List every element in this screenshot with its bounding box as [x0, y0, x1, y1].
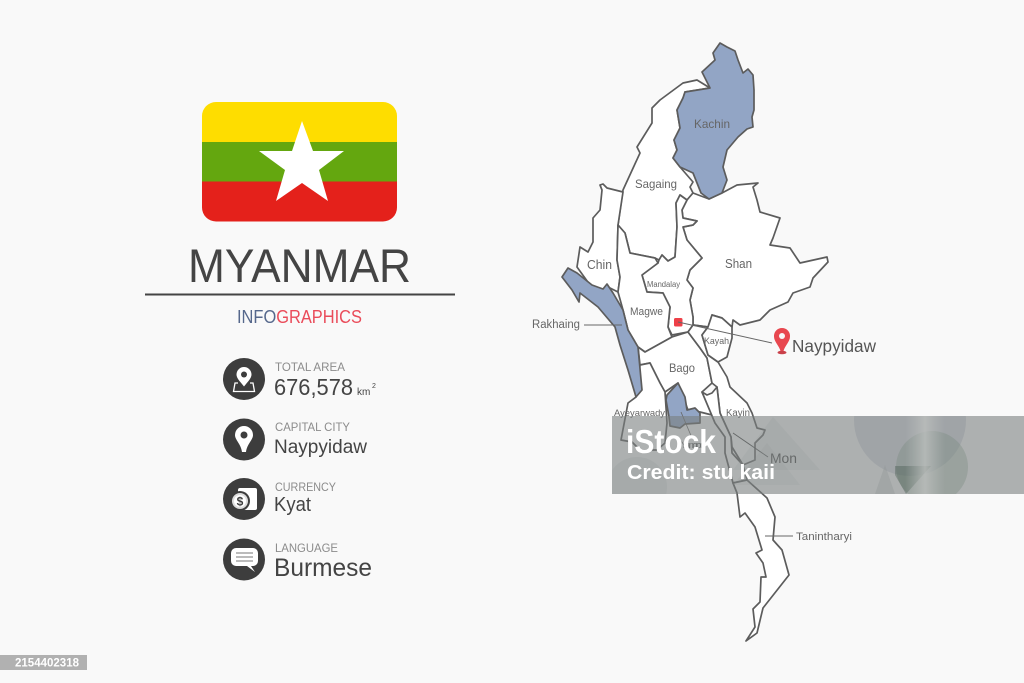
- icon: coins: $: [237, 494, 244, 508]
- region: Sagaing: [618, 80, 710, 261]
- stat: total area: 676,578: [274, 374, 353, 400]
- stat: total area: km: [357, 387, 370, 398]
- callout: Naypyidaw capital: [678, 322, 876, 356]
- stat: total area: [223, 358, 376, 400]
- callout: Rakhaing: Rakhaing: [532, 319, 580, 331]
- label: Kayin: Kayin: [726, 408, 750, 419]
- icon: map pin on map: [223, 358, 265, 400]
- watermark credit text: Credit: stu kaii: [627, 462, 775, 484]
- stat: currency: Kyat: [274, 494, 311, 516]
- stat: capital city: [223, 418, 367, 460]
- region: Mon: [702, 387, 747, 483]
- map of Myanmar: [532, 43, 876, 641]
- stat: total area: 2: [372, 383, 376, 390]
- region: Kachin: [673, 43, 754, 199]
- callout: Rakhaing: [532, 319, 622, 331]
- label: Chin: Chin: [587, 258, 612, 272]
- callout: Tanintharyi: Tanintharyi: [796, 531, 852, 543]
- stat: capital city: Naypyidaw: [274, 437, 367, 458]
- label: Bago: Bago: [669, 361, 695, 375]
- label: Shan: Shan: [725, 257, 752, 271]
- region: Tanintharyi: [733, 480, 789, 641]
- icon: red location pin: [774, 328, 790, 354]
- region: Rakhine: [562, 268, 642, 397]
- stat: currency: [223, 478, 336, 520]
- region: Kayah: [702, 315, 732, 362]
- flag of Myanmar: [202, 102, 397, 222]
- stat: language: Burmese: [274, 554, 372, 582]
- subtitle: INFOGRAPHICS: [237, 307, 362, 327]
- Yangon leader line and label: Yangon: [681, 440, 705, 450]
- label: Kayah: Kayah: [704, 336, 729, 347]
- image id tag: [0, 655, 87, 670]
- watermark band: [612, 416, 1024, 494]
- region: Bago: [638, 332, 712, 415]
- stat: currency: CURRENCY: [275, 480, 336, 494]
- stat: language: LANGUAGE: [275, 541, 338, 555]
- label: Mandalay: Mandalay: [647, 280, 680, 289]
- region: Mandalay: [642, 195, 702, 335]
- callout: Tanintharyi: [765, 531, 852, 543]
- label: Kachin: Kachin: [694, 117, 730, 131]
- icon: speech bubble: [223, 538, 265, 580]
- region: Yangon: [666, 383, 700, 428]
- icon: location pin: [223, 418, 265, 460]
- Yangon leader line and label: [681, 412, 705, 450]
- region: Ayeyarwady: [621, 363, 667, 450]
- label: Ayeyarwady: Ayeyarwady: [614, 408, 665, 419]
- stat: language: [223, 538, 372, 582]
- label: Sagaing: Sagaing: [635, 177, 677, 191]
- callout: Mon: Mon: [770, 450, 797, 466]
- title: MYANMAR: [188, 239, 411, 292]
- stat: capital city: CAPITAL CITY: [275, 420, 350, 434]
- watermark logo text: iStock: [626, 423, 717, 460]
- stat: total area: TOTAL AREA: [275, 360, 345, 374]
- region: Chin: [577, 184, 623, 292]
- callout: Naypyidaw capital: Naypyidaw: [792, 336, 876, 356]
- image id tag: 2154402318: [15, 658, 80, 670]
- region: Kayin: [688, 325, 765, 465]
- region: Magwe: [617, 225, 672, 352]
- label: Magwe: Magwe: [630, 306, 663, 318]
- region: Shan: [682, 183, 828, 327]
- capital marker: [674, 318, 682, 326]
- callout: Mon: [733, 433, 797, 466]
